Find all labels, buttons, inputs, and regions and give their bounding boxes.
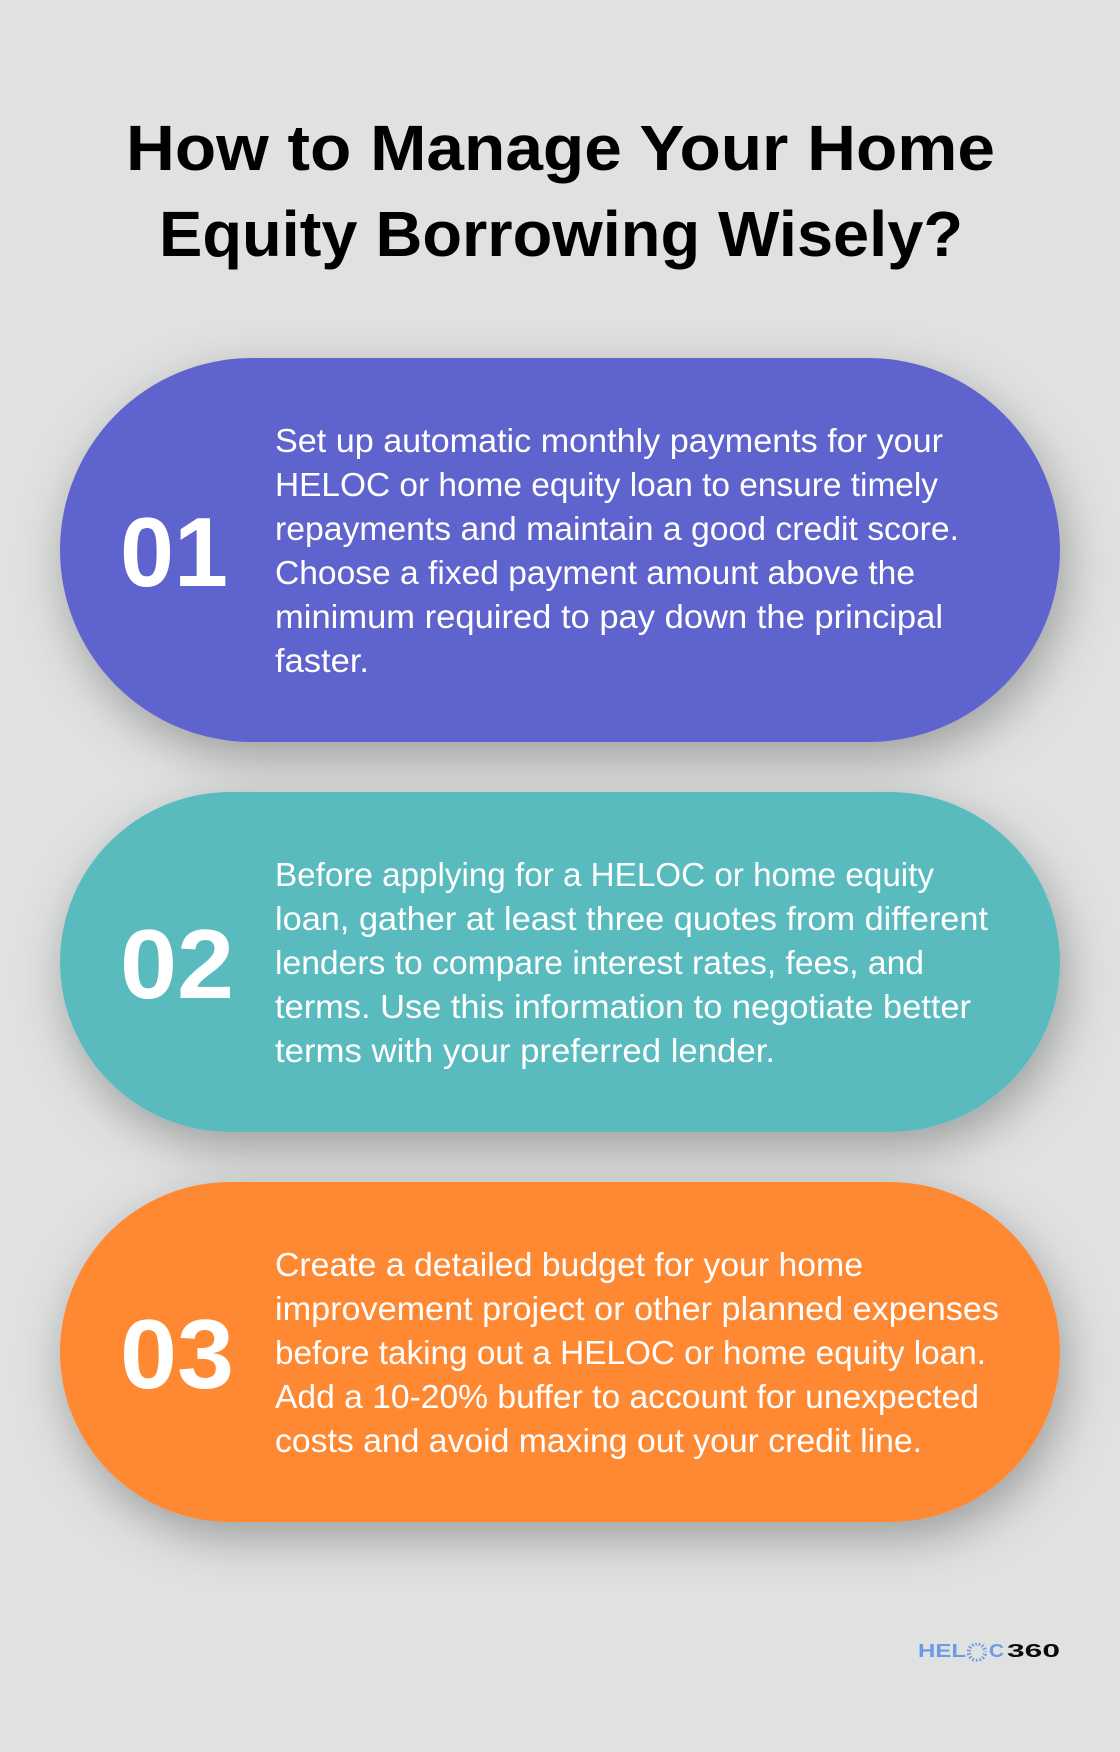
card background: step 03: [60, 1182, 1060, 1522]
text block: step 03: before taking out a HELOC or home equity loan.: [275, 1334, 986, 1371]
step number 03: 03: [120, 1299, 234, 1409]
text block: step 02: Before applying for a HELOC or home equity: [275, 856, 935, 893]
text block: step 01: minimum required to pay down the principal: [275, 598, 943, 635]
logo: HELOC360: [918, 1638, 1060, 1668]
text block: step 02: terms. Use this information to negotiate better: [275, 988, 971, 1025]
card background: step 02: [60, 792, 1060, 1132]
text block: step 02: lenders to compare interest rates, fees, and: [275, 944, 924, 981]
text block: step 01: Set up automatic monthly payments for your: [275, 422, 943, 459]
text block: step 01: repayments and maintain a good credit score.: [275, 510, 959, 547]
step number 01: 01: [120, 497, 228, 607]
title: [126, 112, 995, 270]
text block: step 02: [275, 856, 988, 1069]
text block: step 01: [275, 422, 959, 679]
text block: step 03: [275, 1246, 999, 1459]
text block: step 03: costs and avoid maxing out your credit line.: [275, 1422, 922, 1459]
text block: step 01: faster.: [275, 642, 369, 679]
panel: step 03: [60, 1182, 1060, 1522]
panel: step 02: [60, 792, 1060, 1132]
text block: step 03: Add a 10-20% buffer to account for unexpected: [275, 1378, 979, 1415]
logo: HELOC360: O: [966, 1638, 988, 1668]
panel: step 01: [60, 358, 1060, 742]
text block: step 03: improvement project or other planned expenses: [275, 1290, 999, 1327]
card background: step 01: [60, 358, 1060, 742]
title: Equity Borrowing Wisely?: [159, 198, 963, 270]
title: How to Manage Your Home: [126, 112, 995, 184]
logo: HELOC360: HEL: [918, 1641, 966, 1661]
text block: step 02: terms with your preferred lender.: [275, 1032, 775, 1069]
text block: step 01: HELOC or home equity loan to ensure timely: [275, 466, 939, 503]
text block: step 01: Choose a fixed payment amount above the: [275, 554, 915, 591]
text block: step 03: Create a detailed budget for your home: [275, 1246, 863, 1283]
logo: HELOC360: 360: [1007, 1641, 1060, 1661]
logo: HELOC360: C: [989, 1641, 1004, 1661]
step number 02: 02: [120, 909, 234, 1019]
text block: step 02: loan, gather at least three quotes from different: [275, 900, 988, 937]
